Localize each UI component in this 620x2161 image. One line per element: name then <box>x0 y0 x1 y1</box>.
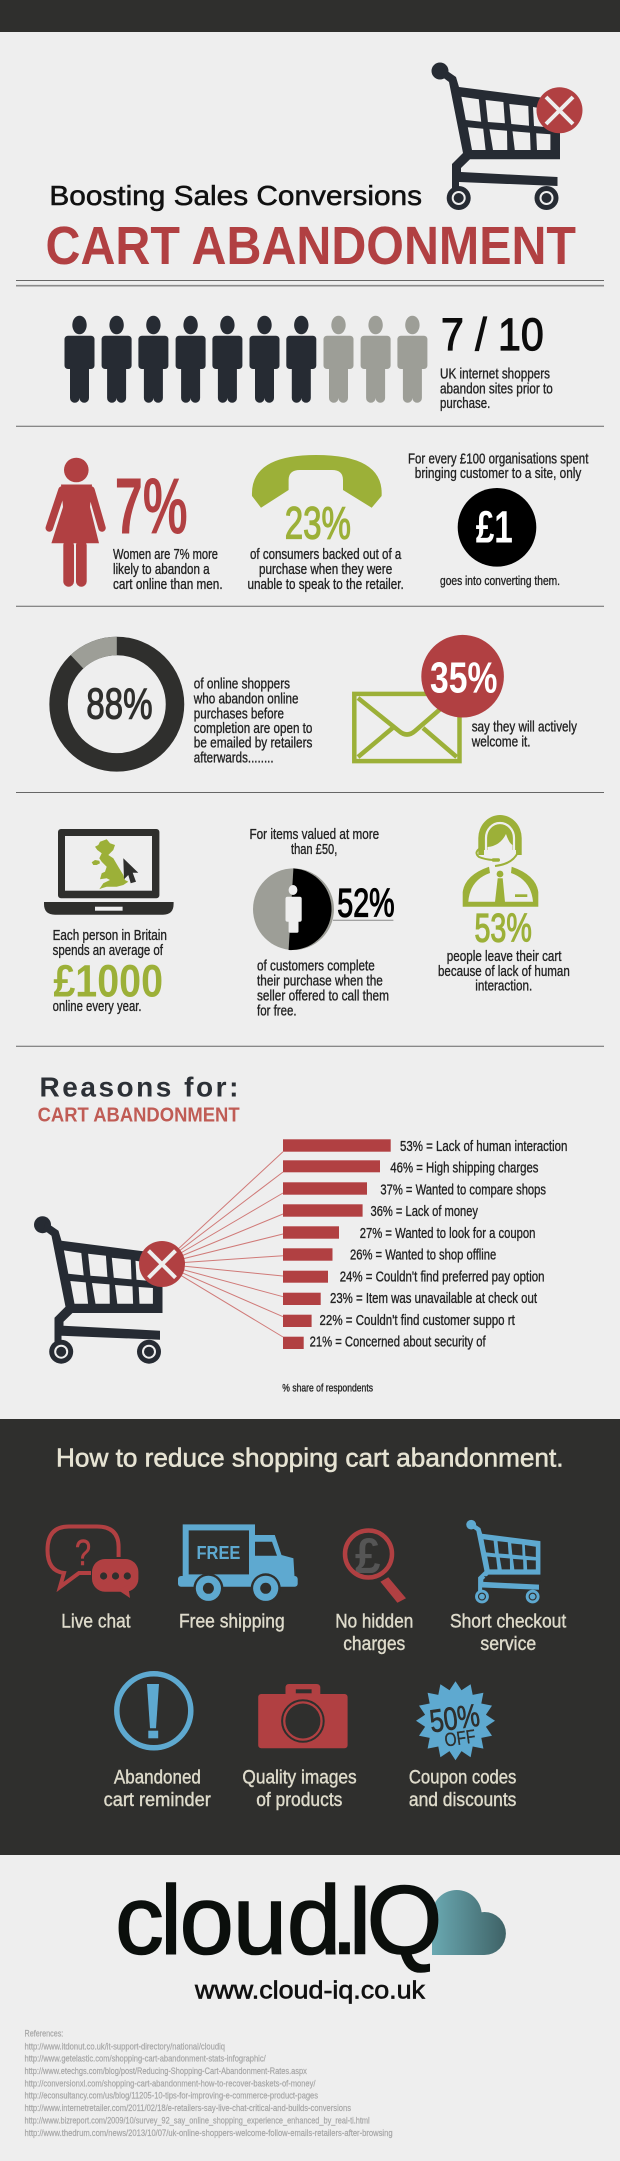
stat: 23% consumers: of consumers backed out of a <box>250 547 402 563</box>
panel: how to reduce abandonment <box>0 1419 620 1855</box>
label: service <box>480 1634 536 1655</box>
title <box>46 180 576 276</box>
icon: shopping cart with red cross <box>432 62 582 210</box>
stat: 7 / 10: abandon sites prior to <box>440 381 553 397</box>
stat: 7% women <box>113 461 223 593</box>
stat: 7% women: cart online than men. <box>113 577 223 593</box>
icon: envelope <box>354 694 460 761</box>
stat: 23% consumers: purchase when they were <box>259 562 392 578</box>
references: http://www.bizreport.com/2009/10/survey_92_say_online_shopping_experience_enhanced_by_real-ti.html <box>24 2116 370 2126</box>
references: http://econsultancy.com/us/blog/11205-10-tips-for-improving-e-commerce-product-pages <box>24 2091 318 2101</box>
icon: live chat: ? <box>75 1532 91 1573</box>
icon: 50% off badge <box>416 1681 495 1760</box>
label: No hidden <box>335 1611 413 1632</box>
references: http://www.etechgs.com/blog/post/Reducing-Shopping-Cart-Abandonment-Rates.aspx <box>24 2066 307 2076</box>
stat: 53% lack of human interaction: because of lack of human <box>438 964 570 980</box>
icon: call centre agent <box>463 815 538 907</box>
label <box>409 1767 516 1811</box>
icon: delivery truck: FREE <box>196 1542 240 1563</box>
stat: £1000 per person: £1000 <box>53 956 163 1007</box>
stat: 52% call back pie: seller offered to call them <box>257 989 389 1005</box>
bar chart: reasons: 22% = Couldn't find customer suppo rt <box>320 1313 515 1329</box>
label <box>335 1611 413 1655</box>
text: online shoppers open to email: purchases before <box>194 706 284 722</box>
stat: £1000 per person: spends an average of <box>53 943 164 959</box>
heading: reasons for cart abandonment: Reasons for: <box>40 1072 238 1103</box>
website address: www.cloud-iq.co.uk <box>194 1976 426 2004</box>
bar chart: reasons: 36% = Lack of money <box>370 1204 479 1220</box>
icon: exclamation mark in circle <box>117 1674 191 1748</box>
connector lines <box>162 1152 283 1337</box>
icon: magnifier with pound sign <box>345 1528 406 1603</box>
bar chart: reasons: 26% = Wanted to shop offline <box>350 1248 496 1264</box>
panel heading: How to reduce shopping cart abandonment. <box>56 1443 564 1473</box>
bar chart: reasons: 21% = Concerned about security of <box>310 1335 486 1351</box>
text: welcome it: welcome it. <box>471 735 531 751</box>
icon: telephone handset <box>252 455 382 508</box>
icon: 50% off badge: OFF <box>443 1726 477 1752</box>
label: Free shipping <box>179 1611 285 1632</box>
label <box>104 1767 211 1811</box>
text: welcome it: say they will actively <box>472 720 578 736</box>
stat: 53% lack of human interaction: 53% <box>474 907 532 951</box>
label: cart reminder <box>104 1790 211 1811</box>
text: welcome it <box>471 720 578 751</box>
pictogram: 7 of 10 shoppers <box>64 316 427 403</box>
stat: 53% lack of human interaction: interaction. <box>475 979 532 995</box>
bar chart: reasons: 27% = Wanted to look for a coupon <box>360 1226 535 1242</box>
logo: cloud.IQ: cloud.IQ <box>115 1866 442 1974</box>
label: Live chat <box>61 1611 131 1632</box>
stat: 35% badge: 35% <box>430 654 497 703</box>
stat: 52% call back pie: 52% <box>337 882 395 926</box>
top bar <box>0 0 620 32</box>
bar chart: reasons <box>283 1139 567 1351</box>
stat: 7% women: likely to abandon a <box>113 562 210 578</box>
stat: 23% consumers <box>248 497 404 593</box>
text: online shoppers open to email <box>193 676 312 767</box>
donut chart: 88%: 88% <box>86 679 153 728</box>
stat: 52% call back pie <box>250 827 395 1020</box>
label <box>242 1767 357 1811</box>
stat: £1000 per person: online every year. <box>53 999 142 1015</box>
title: CART ABANDONMENT <box>46 216 576 276</box>
stat: 7 / 10 <box>440 309 553 412</box>
references: References: <box>24 2029 63 2039</box>
title: Boosting Sales Conversions <box>49 180 422 211</box>
bar chart: reasons: 53% = Lack of human interaction <box>400 1139 567 1155</box>
references: http://www.internetretailer.com/2011/02/18/e-retailers-say-live-chat-critical-and-builds-conversions <box>24 2103 351 2113</box>
stat: 52% call back pie: their purchase when the <box>257 974 383 990</box>
label <box>450 1611 567 1655</box>
label: of products <box>256 1790 342 1811</box>
references: http://www.getelastic.com/shopping-cart-abandonment-stats-infographic/ <box>24 2054 266 2064</box>
stat: 53% lack of human interaction <box>438 907 570 995</box>
references: http://www.thedrum.com/news/2013/10/07/uk-online-shoppers-welcome-follow-emails-retailers-after-browsing <box>24 2128 393 2138</box>
stat: £1000 per person <box>53 928 167 1015</box>
label: Abandoned <box>114 1767 201 1788</box>
stat: 7 / 10: 7 / 10 <box>441 309 544 360</box>
icon: camera <box>258 1684 348 1748</box>
icon: 50% off badge: 50% <box>427 1697 482 1739</box>
icon: live chat <box>48 1526 138 1598</box>
stat: 52% call back pie: For items valued at more <box>250 827 379 843</box>
icon: laptop with UK map <box>44 829 174 915</box>
icon: woman <box>49 458 102 587</box>
icon: magnifier with pound sign: £ <box>355 1528 381 1584</box>
stat: 53% lack of human interaction: people leave their cart <box>447 949 562 965</box>
stat: £1 from every £100: goes into converting them. <box>440 573 560 588</box>
references: http://conversionxl.com/shopping-cart-abandonment-how-to-recover-baskets-of-money/ <box>24 2079 316 2089</box>
stat: £1 from every £100: bringing customer to a site, only <box>415 466 582 482</box>
label: charges <box>343 1634 405 1655</box>
stat: 35% badge <box>421 635 504 718</box>
stat: 23% consumers: unable to speak to the retailer. <box>248 577 404 593</box>
icon: shopping cart with red cross <box>34 1216 185 1364</box>
bar chart: reasons: 46% = High shipping charges <box>390 1161 538 1177</box>
text: online shoppers open to email: afterwards........ <box>194 751 274 767</box>
stat: 52% call back pie: of customers complete <box>257 959 375 975</box>
stat: 7% women: Women are 7% more <box>113 547 218 563</box>
label: Short checkout <box>450 1611 567 1632</box>
icon: blue shopping cart <box>466 1520 540 1603</box>
bar chart: reasons: 23% = Item was unavailable at check out <box>330 1291 537 1307</box>
stat: 7 / 10: UK internet shoppers <box>440 366 550 382</box>
references <box>24 2029 393 2138</box>
label: and discounts <box>409 1790 516 1811</box>
stat: 52% call back pie: for free. <box>257 1004 297 1020</box>
stat: £1 from every £100 <box>408 451 588 588</box>
stat: £1000 per person: Each person in Britain <box>53 928 167 944</box>
bar chart: reasons: 24% = Couldn't find preferred pay option <box>340 1269 544 1285</box>
stat: 7% women: 7% <box>115 461 188 550</box>
stat: £1 from every £100: £1 <box>476 502 513 553</box>
heading: reasons for cart abandonment: CART ABANDONMENT <box>38 1105 240 1127</box>
chart note: % share of respondents <box>282 1382 373 1394</box>
label: Quality images <box>242 1767 357 1788</box>
text: online shoppers open to email: of online shoppers <box>194 676 290 692</box>
stat: 52% call back pie: than £50, <box>291 842 337 858</box>
heading: reasons for cart abandonment <box>38 1072 240 1127</box>
text: online shoppers open to email: completion are open to <box>194 721 312 737</box>
bar chart: reasons: 37% = Wanted to compare shops <box>380 1183 546 1199</box>
stat: 7 / 10: purchase. <box>440 396 490 412</box>
text: online shoppers open to email: be emailed by retailers <box>194 736 312 752</box>
label: Coupon codes <box>409 1767 516 1788</box>
text: online shoppers open to email: who abandon online <box>193 691 298 707</box>
donut chart: 88% <box>59 646 175 762</box>
stat: 23% consumers: 23% <box>285 497 351 548</box>
references: http://www.itdonut.co.uk/it-support-directory/national/cloudiq <box>24 2041 225 2051</box>
icon: delivery truck <box>178 1527 298 1603</box>
